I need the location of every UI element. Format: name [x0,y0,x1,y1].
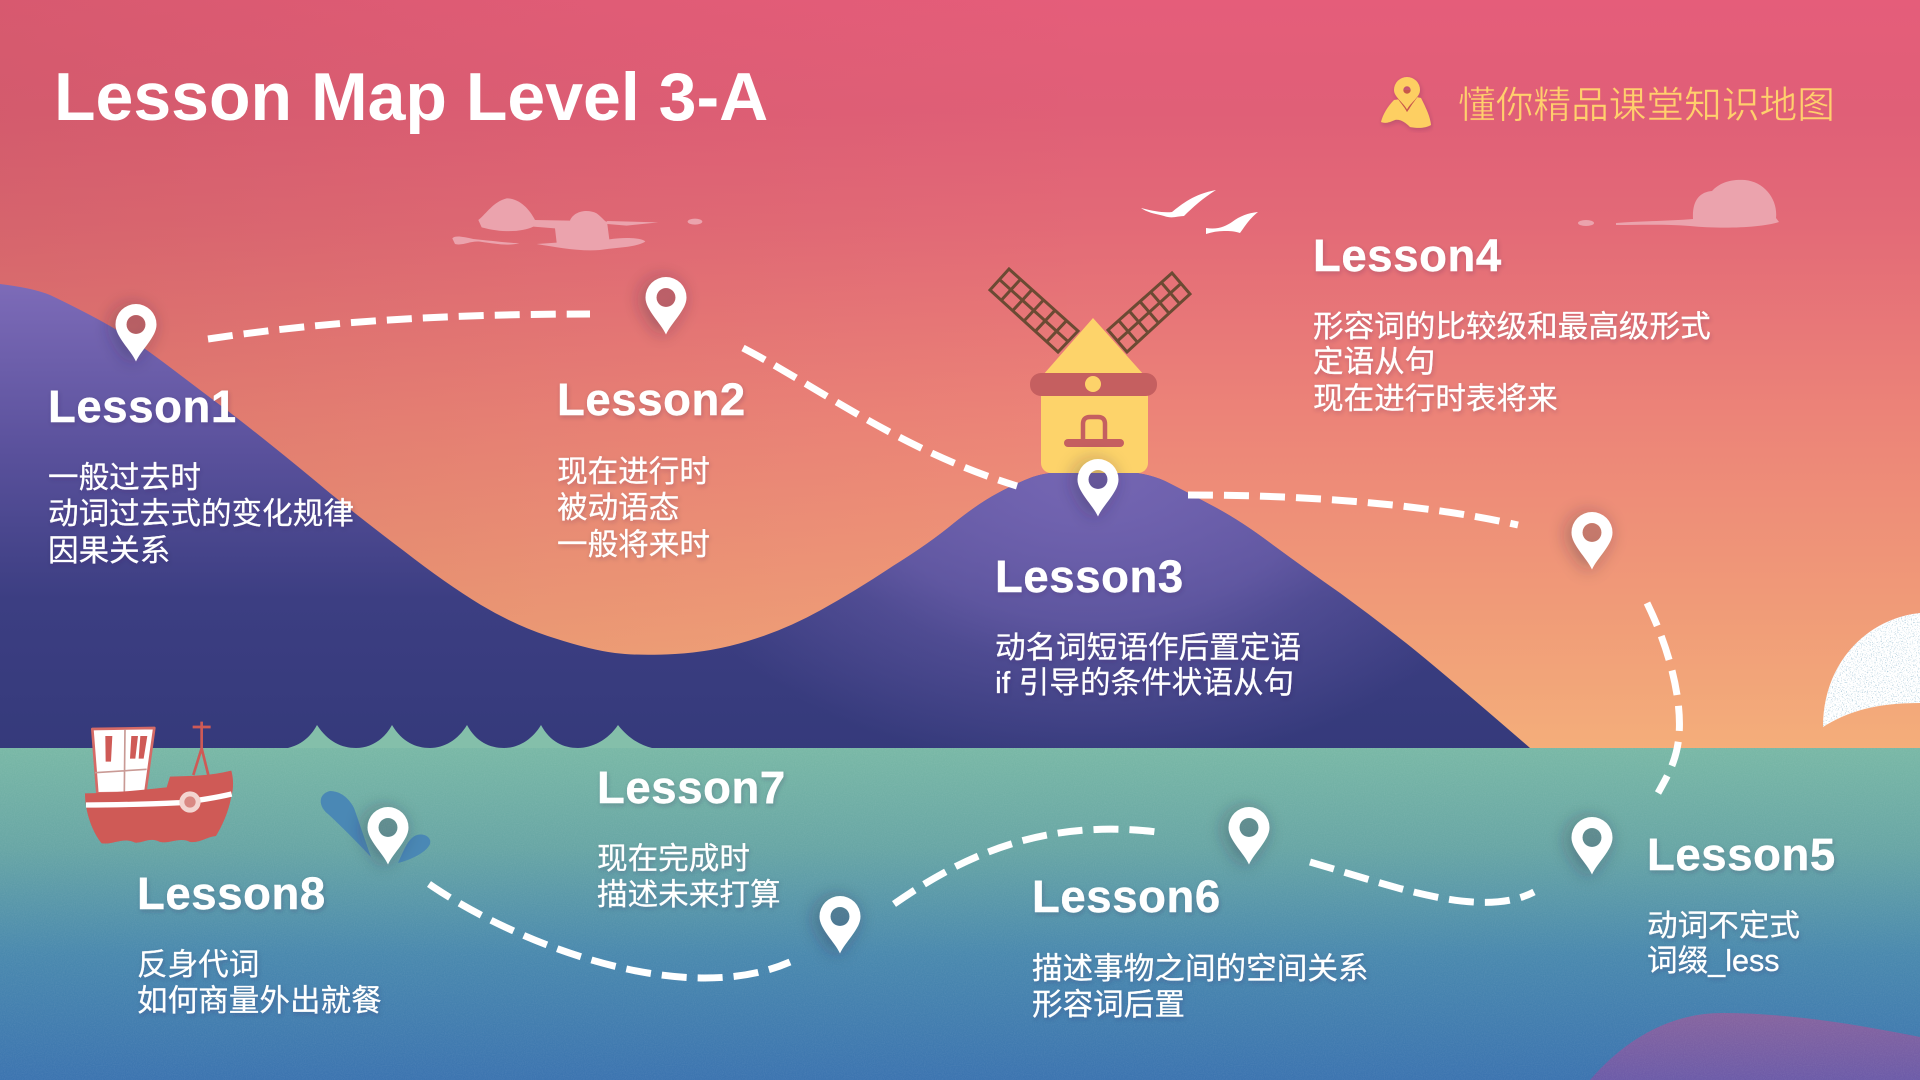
text block: Lesson5: Lesson5 [1647,829,1836,880]
boat cabin frames [95,729,147,792]
text block: Lesson3: Lesson3 [995,551,1184,602]
pin: Lesson1 [116,304,156,362]
text block: Lesson2: Lesson2 [557,374,746,425]
boat mast [193,722,211,775]
text block: Lesson8: 如何商量外出就餐 [137,984,382,1018]
text block: Lesson7 [597,762,786,912]
text block: Lesson1: 一般过去时 [48,461,201,495]
route 7 to 8 [429,884,790,978]
pin: Lesson2 [646,277,686,334]
text block: Lesson8: Lesson8 [137,868,326,919]
text block: Lesson8: 反身代词 [137,948,259,982]
title: Lesson Map Level 3-A [54,59,768,135]
pin: Lesson5 [1572,817,1612,874]
text block: Lesson5: 动词不定式 [1647,909,1800,943]
windmill roof [1043,318,1144,375]
text block: Lesson4: 形容词的比较级和最高级形式 [1313,310,1711,344]
splash [321,791,430,863]
text block: Lesson3: if 引导的条件状语从句 [995,666,1294,700]
route 3 to 4 [1188,495,1518,525]
windmill door [1068,417,1120,443]
dashed route [208,314,1679,978]
windmill body [1041,394,1148,473]
setting moon [1820,610,1920,730]
text block: Lesson2: 一般将来时 [557,528,710,562]
logo: map and pin icon [1381,77,1431,128]
windmill [990,269,1190,473]
pin: Lesson3 [1078,459,1118,516]
pin: Lesson7 [820,896,860,954]
boat stripe [86,794,232,805]
text block: Lesson4: 定语从句 [1313,345,1435,379]
text block: Lesson4 [1313,230,1711,416]
sea with wave crests [0,725,1920,1080]
boat hull [85,771,233,844]
seagull 1 [1141,190,1216,217]
text block: Lesson3 [995,551,1301,700]
route 5 to 6 [1310,862,1534,902]
text block: Lesson4: Lesson4 [1313,230,1502,281]
text block: Lesson8 [137,868,382,1018]
text block: Lesson2 [557,374,746,562]
pin: Lesson8 [368,807,408,864]
text block: Lesson1: 动词过去式的变化规律 [48,497,354,531]
bottom-right purple island [1590,1013,1920,1080]
text block: Lesson7: 描述未来打算 [597,878,781,912]
subtitle: 懂你精品课堂知识地图 [1458,84,1835,126]
pin: Lesson4 [1572,512,1612,570]
text block: Lesson1 [48,381,354,568]
route 6 to 7 [894,829,1157,904]
text block: Lesson6: Lesson6 [1032,871,1221,922]
route 2 to 3 [743,348,1017,486]
text block: Lesson7: Lesson7 [597,762,786,813]
windmill sails [990,269,1190,352]
seagulls [1141,190,1258,234]
text block: Lesson7: 现在完成时 [597,842,750,876]
text block: Lesson6: 形容词后置 [1032,988,1185,1022]
cloud right [1578,180,1779,228]
cloud left [452,198,702,250]
text block: Lesson6 [1032,871,1369,1022]
pin: Lesson6 [1228,807,1270,864]
text block: Lesson2: 被动语态 [557,491,679,525]
text block: Lesson3: 动名词短语作后置定语 [995,631,1301,665]
text block: Lesson1: Lesson1 [48,381,237,432]
boat windows [105,736,147,762]
route 4 to 5 [1647,603,1679,793]
sky background [0,0,1920,750]
boat [85,722,233,844]
text block: Lesson6: 描述事物之间的空间关系 [1032,952,1369,986]
text block: Lesson5: 词缀_less [1647,944,1780,978]
text block: Lesson1: 因果关系 [48,534,170,568]
text block: Lesson5 [1647,829,1836,978]
boat emblem [179,791,201,813]
boat cabin [92,728,154,793]
route 1 to 2 [208,314,590,339]
windmill window [1085,376,1101,392]
windmill band [1030,373,1157,396]
text block: Lesson2: 现在进行时 [557,455,710,489]
sea grain texture [0,748,1920,1080]
purple hills [0,284,1530,748]
seagull 2 [1206,212,1258,234]
text block: Lesson4: 现在进行时表将来 [1313,382,1558,416]
